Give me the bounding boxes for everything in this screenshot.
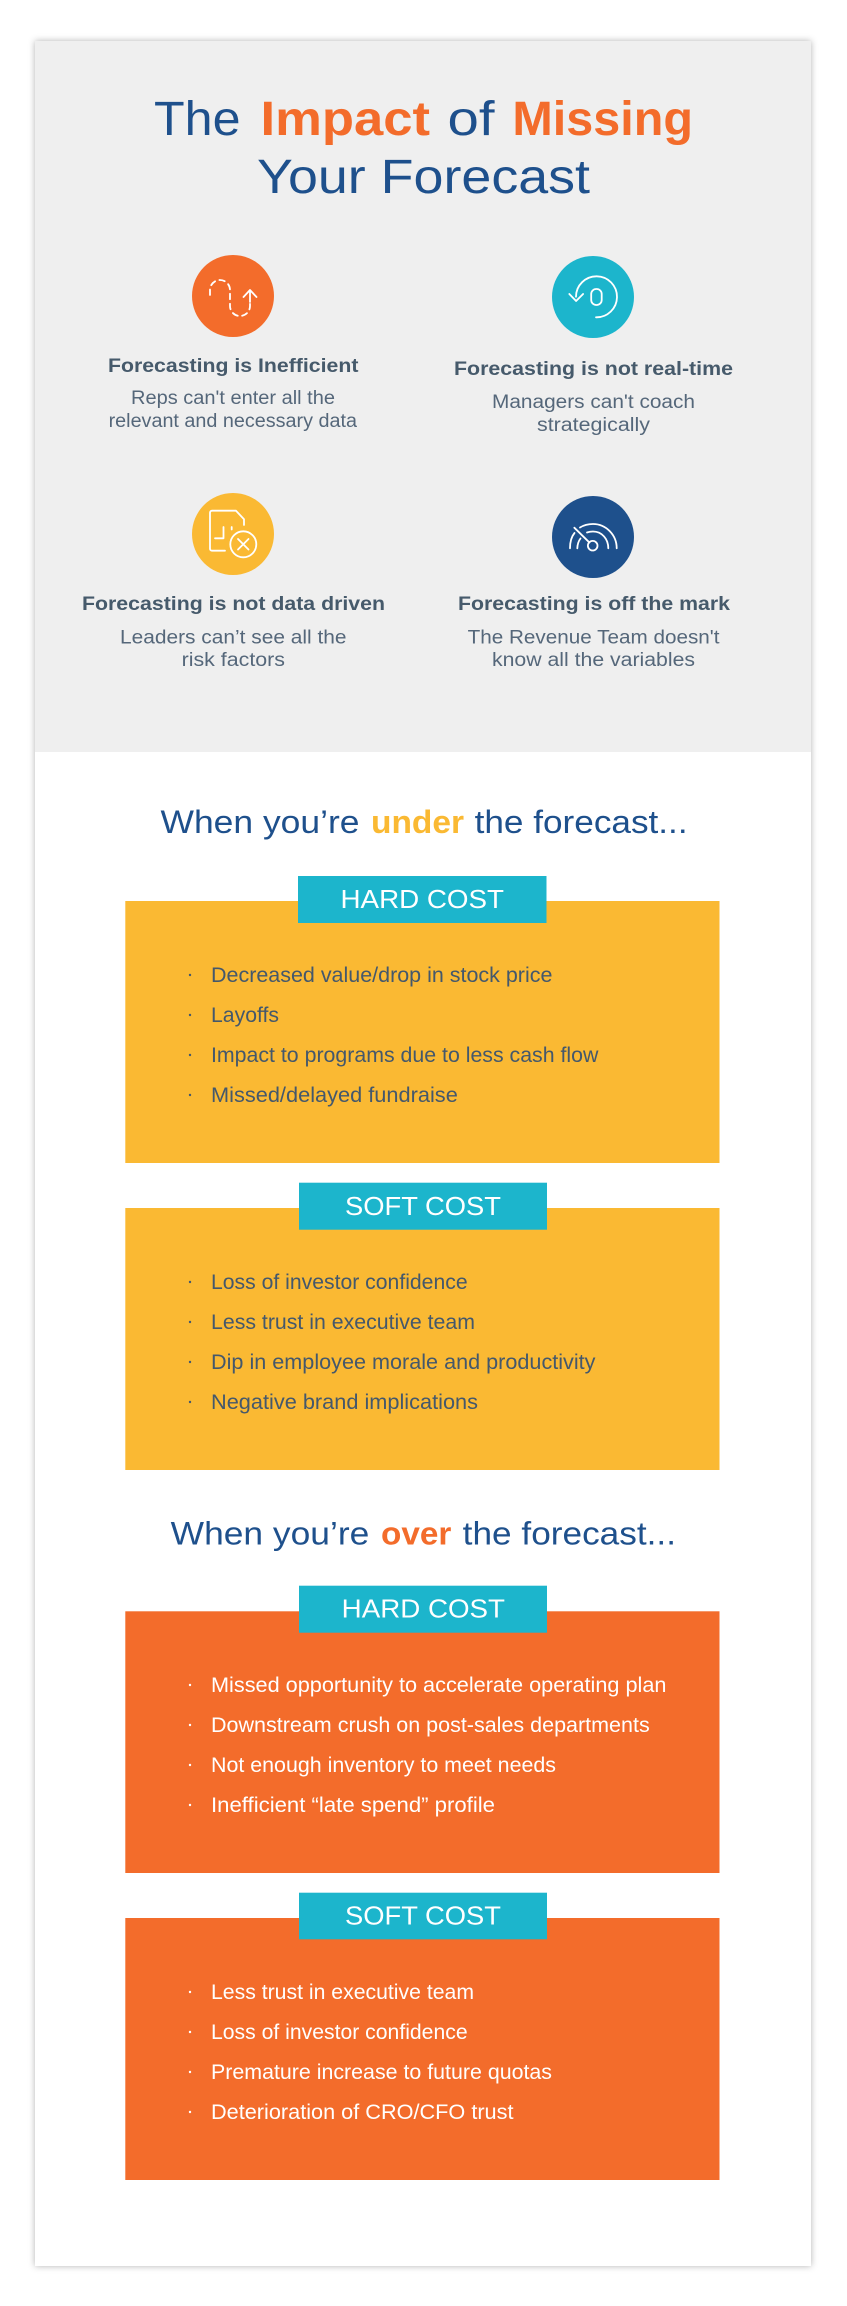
bullet list: Not enough inventory to meet needs xyxy=(211,1754,556,1777)
bullet list: Inefficient “late spend” profile xyxy=(211,1794,495,1817)
title: of xyxy=(448,93,495,146)
bullet list: Missed/delayed fundraise xyxy=(211,1084,458,1107)
heading: over the forecast: over xyxy=(381,1516,451,1552)
heading: Forecasting is not real-time xyxy=(454,359,733,380)
item: forecasting is off the mark xyxy=(458,496,730,671)
title xyxy=(154,93,693,204)
heading: Forecasting is Inefficient xyxy=(108,356,359,377)
panel background xyxy=(35,41,811,752)
bullet list: Less trust in executive team xyxy=(211,1311,475,1334)
description: know all the variables xyxy=(492,650,695,671)
bullet list: Downstream crush on post-sales departments xyxy=(211,1714,650,1737)
bullet list xyxy=(189,1981,552,2124)
title: Your Forecast xyxy=(257,151,590,204)
description: Leaders can’t see all the xyxy=(120,628,346,648)
heading: Forecasting is off the mark xyxy=(458,594,730,615)
panel: over soft cost xyxy=(125,1893,720,2180)
heading: over the forecast xyxy=(171,1516,676,1552)
panel: under hard cost xyxy=(125,876,720,1163)
tag: soft cost: SOFT COST xyxy=(345,1191,501,1221)
panel: under soft cost xyxy=(125,1183,720,1470)
title: Missing xyxy=(512,93,693,146)
bullet list: Loss of investor confidence xyxy=(211,1271,468,1294)
bullet list: Missed opportunity to accelerate operating plan xyxy=(211,1674,666,1697)
description xyxy=(468,628,720,671)
bullet list: Loss of investor confidence xyxy=(211,2021,468,2044)
heading: over the forecast: the forecast... xyxy=(463,1516,676,1552)
tag: hard cost xyxy=(298,876,546,923)
description: relevant and necessary data xyxy=(109,411,357,432)
description: The Revenue Team doesn't xyxy=(468,628,720,648)
icon: countdown to zero xyxy=(552,256,634,338)
bullet list: Layoffs xyxy=(211,1004,279,1027)
bullet list: Impact to programs due to less cash flow xyxy=(211,1044,599,1067)
panel: forecast problems xyxy=(35,41,811,752)
panel: over hard cost xyxy=(125,1586,720,1873)
icon: dashed path with arrow xyxy=(192,255,274,337)
icon: speedometer xyxy=(552,496,634,578)
icon: document with x xyxy=(192,493,274,575)
item: forecasting is inefficient xyxy=(108,255,359,432)
title: Impact xyxy=(260,93,430,146)
tag: soft cost: SOFT COST xyxy=(345,1901,501,1931)
bullet list: Less trust in executive team xyxy=(211,1981,474,2004)
heading: under the forecast: the forecast... xyxy=(475,804,688,840)
title: The xyxy=(154,93,240,146)
description xyxy=(120,628,346,671)
item: forecasting is not real-time xyxy=(454,256,733,436)
description: risk factors xyxy=(182,650,285,671)
description: Managers can't coach xyxy=(492,392,695,413)
bullet list xyxy=(189,1271,596,1414)
tag: soft cost xyxy=(299,1183,547,1230)
bullet list: Dip in employee morale and productivity xyxy=(211,1351,596,1374)
heading: under the forecast: under xyxy=(371,804,464,840)
item: forecasting is not data driven xyxy=(82,493,385,671)
description: Reps can't enter all the xyxy=(131,388,335,409)
bullet list xyxy=(189,1674,667,1817)
bullet list: Decreased value/drop in stock price xyxy=(211,964,552,987)
heading: under the forecast: When you’re xyxy=(160,804,360,840)
tag: hard cost: HARD COST xyxy=(342,1594,505,1624)
description xyxy=(109,388,357,432)
bullet list: Negative brand implications xyxy=(211,1391,478,1414)
tag: soft cost xyxy=(299,1893,547,1939)
bullet list: Premature increase to future quotas xyxy=(211,2061,552,2084)
heading: over the forecast: When you’re xyxy=(171,1516,369,1552)
tag: hard cost xyxy=(299,1586,547,1633)
bullet list: Deterioration of CRO/CFO trust xyxy=(211,2101,514,2124)
description: strategically xyxy=(537,415,651,436)
heading: under the forecast xyxy=(160,804,688,840)
description xyxy=(492,392,695,436)
heading: Forecasting is not data driven xyxy=(82,594,385,615)
bullet list xyxy=(189,964,599,1107)
tag: hard cost: HARD COST xyxy=(340,884,504,914)
